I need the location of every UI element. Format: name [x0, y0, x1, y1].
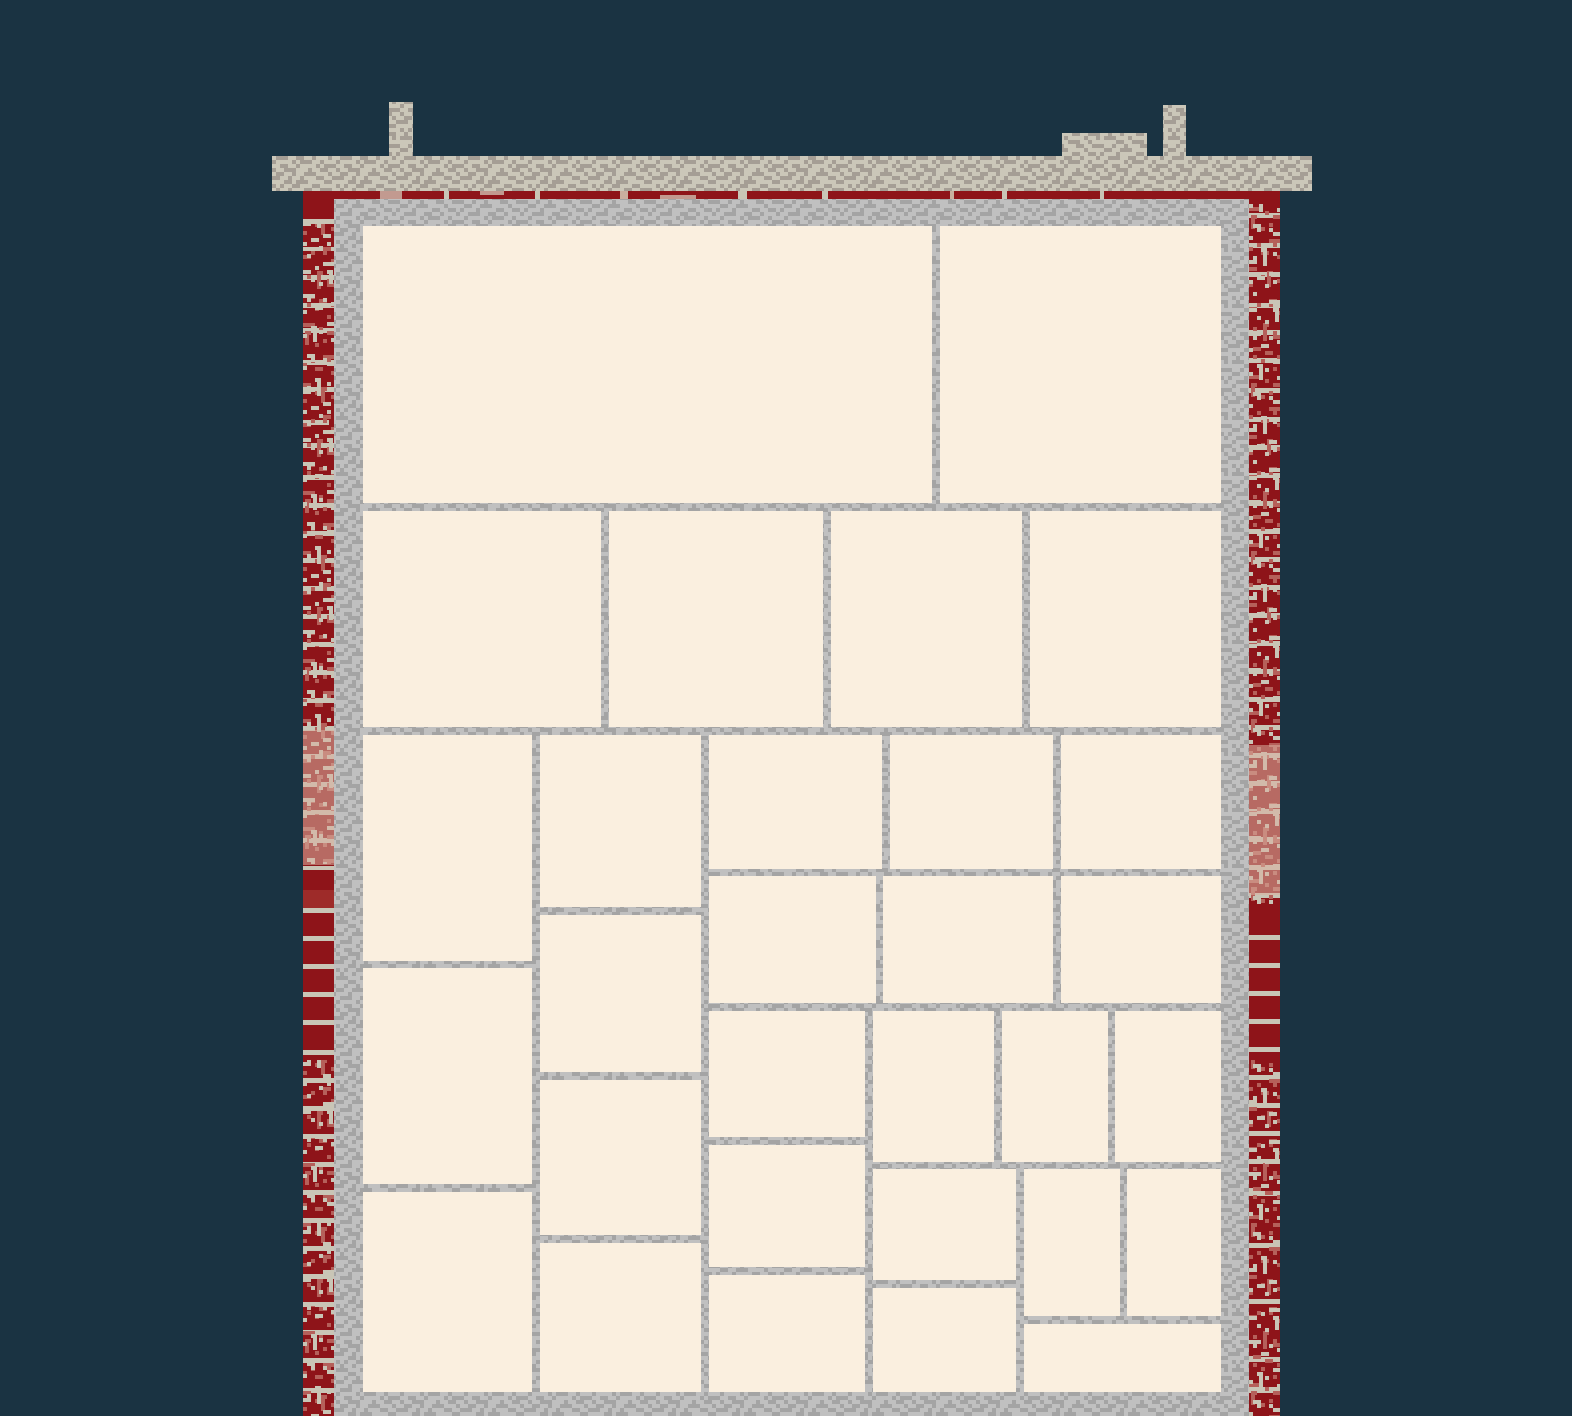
panel: second column 1 — [540, 735, 701, 907]
building facade frame — [334, 199, 1249, 1416]
panel: row 1 right — [940, 226, 1221, 503]
panel: lower cell 1 — [873, 1169, 1016, 1280]
panel: upper row cell 3 — [1061, 735, 1221, 869]
left chimney — [389, 102, 413, 158]
roof vent box — [1062, 133, 1147, 158]
panel: left column middle — [363, 968, 532, 1184]
panel: lower right cell 2 — [1127, 1169, 1221, 1316]
panel: tall cell 1 — [873, 1011, 994, 1162]
panel: row 2 column 3 — [831, 511, 1022, 727]
panel: left column bottom — [363, 1192, 532, 1392]
panel: second column 4 — [540, 1243, 701, 1392]
brick wall left — [303, 191, 334, 1416]
panel: row 2 column 1 — [363, 511, 601, 727]
panel: upper row cell 2 — [890, 735, 1053, 869]
roof beam — [272, 156, 1312, 191]
panel: tall cell 2 — [1002, 1011, 1108, 1162]
panel: lower cell 2 — [873, 1288, 1016, 1392]
panel: third column 2 — [709, 1145, 865, 1267]
brick wall right — [1249, 191, 1280, 1416]
panel: second row cell 2 — [883, 876, 1053, 1003]
panel: upper row cell 1 — [709, 735, 882, 869]
panel: third column 3 — [709, 1275, 865, 1392]
right chimney — [1163, 105, 1186, 158]
panels grid — [363, 226, 1221, 1392]
panel: row 2 column 4 — [1030, 511, 1221, 727]
panel: second column 2 — [540, 915, 701, 1072]
panel: second column 3 — [540, 1080, 701, 1235]
panel: third column 1 — [709, 1011, 865, 1137]
panel: left column top — [363, 735, 532, 961]
panel: second row cell 1 — [709, 876, 876, 1003]
panel: second row cell 3 — [1061, 876, 1221, 1003]
panel: bottom right wide — [1024, 1324, 1221, 1392]
panel: lower right cell 1 — [1024, 1169, 1120, 1316]
panel: tall cell 3 — [1115, 1011, 1221, 1162]
panel: row 2 column 2 — [609, 511, 823, 727]
red band under roof — [303, 191, 1280, 199]
panel: row 1 wide — [363, 226, 932, 503]
